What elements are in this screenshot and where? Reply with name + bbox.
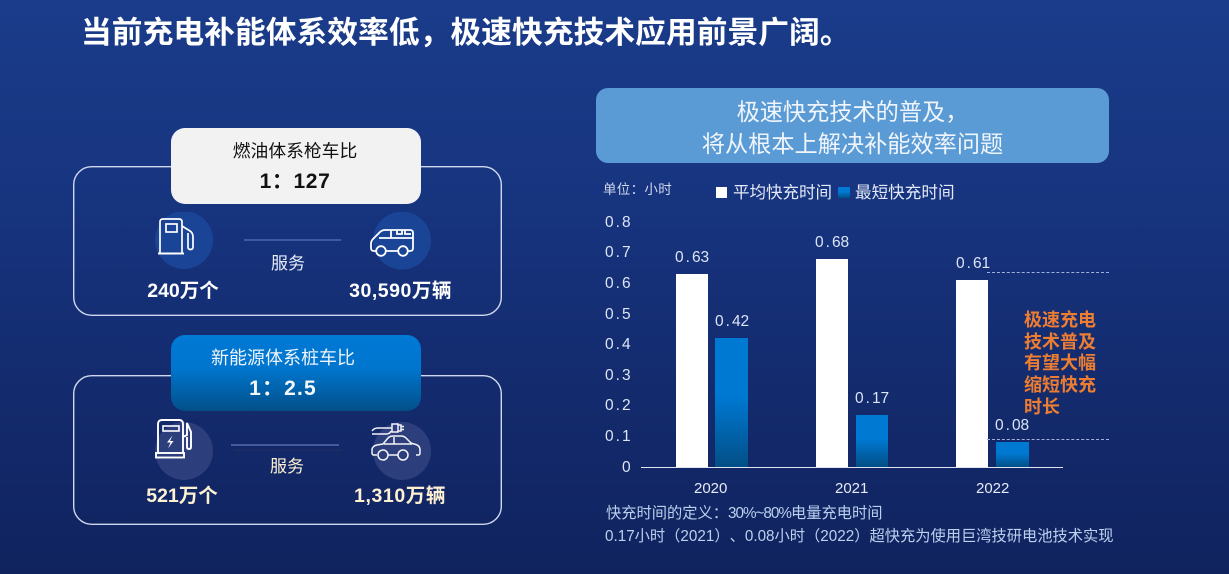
connector line: new energy [231, 444, 339, 446]
annotation: orange callout [1024, 310, 1096, 417]
value: 0.68: 0.68 [815, 234, 849, 251]
stat: fuel vehicles: 30,590万辆 [349, 280, 452, 302]
bar: 2022 shortest [996, 442, 1029, 467]
icon: fuel pump [155, 212, 213, 269]
panel outline: new energy [73, 375, 502, 525]
annotation: orange callout: 时长 [1024, 397, 1060, 417]
value: 0.17: 0.17 [855, 390, 889, 407]
callout: new energy ratio [171, 335, 421, 411]
y axis labels: 0 [622, 459, 631, 476]
icon: electric car [371, 422, 431, 480]
bar: 2020 shortest [715, 338, 748, 467]
panel: fuel system ratio [73, 128, 502, 316]
callout value: new energy: 1：2.5 [249, 377, 317, 400]
connector line: fuel [244, 239, 341, 240]
label: serves (fuel): 服务 [271, 254, 305, 273]
bar: 2021 shortest [856, 415, 888, 467]
y axis labels: 0.6 [605, 275, 631, 292]
annotation: orange callout: 缩短快充 [1024, 375, 1096, 395]
y axis labels: 0.3 [605, 367, 631, 384]
label: unit: 单位：小时 [603, 182, 672, 197]
connector shadow: new energy [234, 449, 342, 450]
callout heading: new energy: 新能源体系桩车比 [211, 348, 355, 368]
footnote [605, 504, 1113, 545]
reference line: top [987, 272, 1109, 273]
title: 当前充电补能体系效率低，极速快充技术应用前景广阔。 [81, 15, 851, 50]
bar: 2022 average [956, 280, 988, 467]
icon: charging pile [155, 419, 213, 480]
chart legend [716, 183, 955, 202]
x label: 2021: 2021 [835, 480, 868, 497]
panel: new energy system ratio [73, 335, 502, 525]
banner text: 将从根本上解决补能效率问题 [702, 131, 1003, 157]
bar: 2020 average [676, 274, 708, 467]
footnote line 2: 0.17小时（2021）、0.08小时（2022）超快充为使用巨湾技研电池技术实现 [605, 528, 1113, 545]
bar: 2021 average [816, 259, 848, 467]
banner text [702, 99, 1003, 157]
callout heading: fuel: 燃油体系枪车比 [233, 141, 357, 161]
bar chart: fast charging time [605, 214, 1063, 497]
stat: charging piles: 521万个 [146, 485, 218, 507]
stat: new energy vehicles: 1,310万辆 [354, 485, 446, 507]
x label: 2020: 2020 [694, 480, 727, 497]
value: 0.42: 0.42 [715, 313, 749, 330]
value: 0.61: 0.61 [956, 255, 990, 272]
banner: headline [596, 88, 1109, 163]
legend label: shortest: 最短快充时间 [855, 183, 955, 202]
y axis labels: 0.7 [605, 244, 631, 261]
banner text: 极速快充技术的普及， [737, 99, 968, 125]
reference line: bottom [987, 439, 1109, 440]
icon: van [370, 212, 431, 270]
value: 0.08: 0.08 [995, 417, 1029, 434]
legend swatch: average [716, 187, 727, 198]
x axis line [641, 467, 1063, 468]
panel outline: fuel [73, 166, 502, 316]
y axis labels: 0.5 [605, 306, 631, 323]
y axis labels: 0.2 [605, 397, 631, 414]
y axis labels: 0.1 [605, 428, 631, 445]
annotation: orange callout: 技术普及 [1024, 332, 1096, 352]
annotation: orange callout: 有望大幅 [1024, 353, 1096, 373]
stat: fuel stations: 240万个 [147, 280, 219, 302]
y axis labels: 0.8 [605, 214, 631, 231]
annotation: orange callout: 极速充电 [1024, 310, 1096, 330]
label: serves (new energy): 服务 [270, 457, 304, 476]
callout value: fuel: 1：127 [260, 170, 330, 193]
x label: 2022: 2022 [976, 480, 1009, 497]
y axis labels [605, 214, 631, 476]
callout: fuel ratio [171, 128, 421, 204]
value: 0.63: 0.63 [675, 249, 709, 266]
legend label: average: 平均快充时间 [733, 184, 832, 202]
legend swatch: shortest [838, 187, 850, 198]
footnote line 1: 快充时间的定义：30%~80%电量充电时间 [606, 505, 882, 522]
y axis labels: 0.4 [605, 336, 631, 353]
